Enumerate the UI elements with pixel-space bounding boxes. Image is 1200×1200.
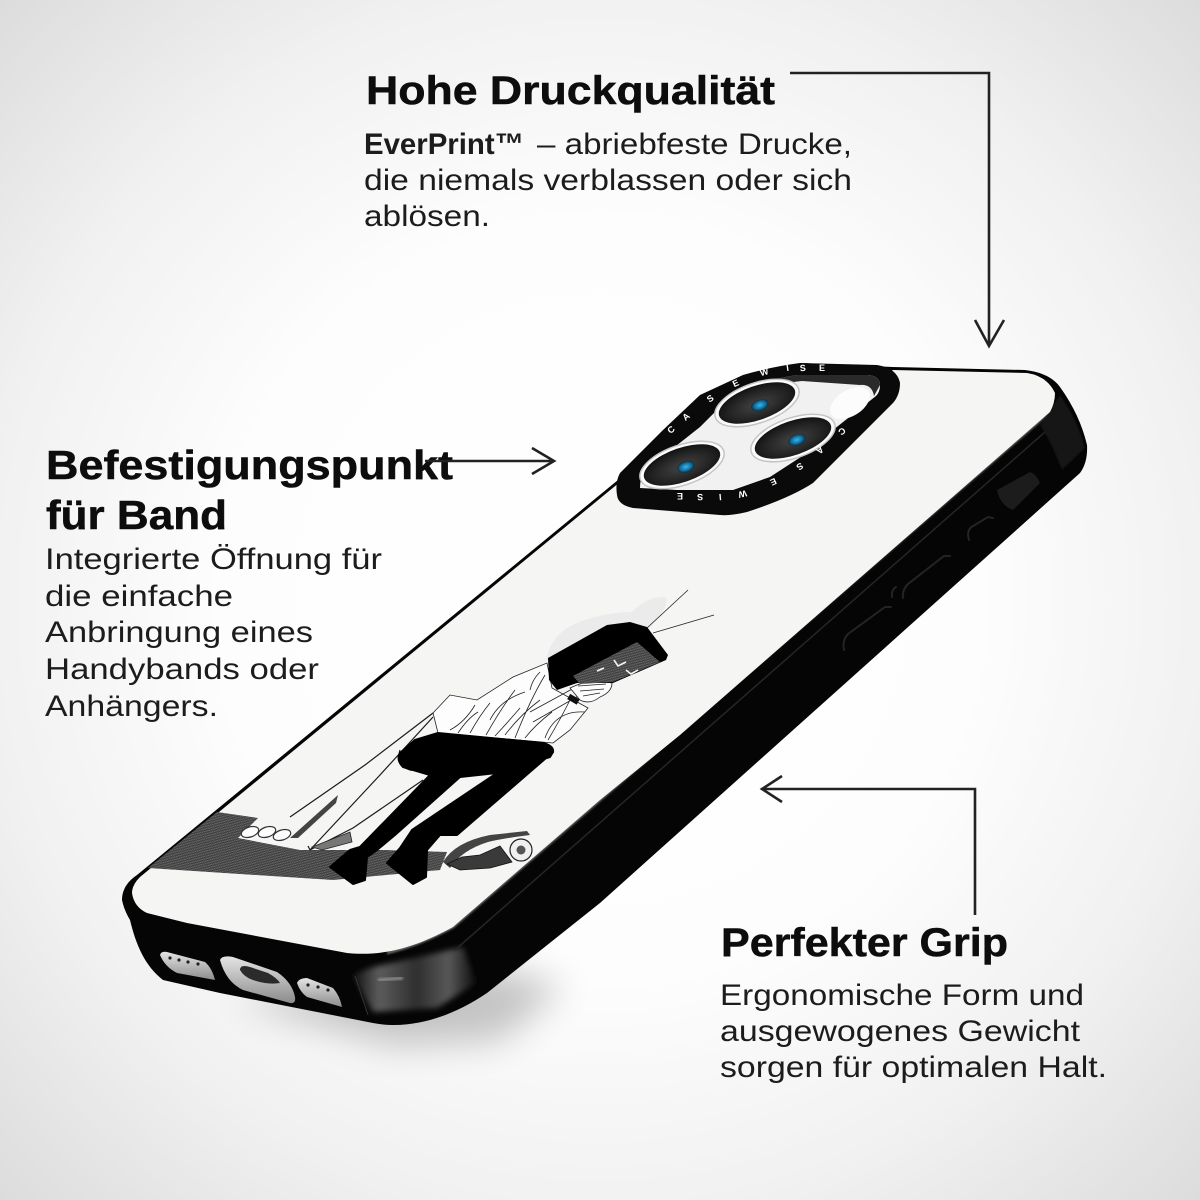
lens top (709, 370, 805, 436)
arrow to print (790, 73, 1004, 346)
heading (46, 442, 453, 538)
brand lettering: A (680, 410, 692, 423)
camera ring (616, 363, 900, 515)
back face (132, 370, 1055, 954)
ghost shadow behind head (546, 597, 667, 660)
heading: Hohe Druckqualität (366, 69, 775, 113)
brand lettering: S (697, 492, 703, 502)
description: Anhängers. (45, 690, 218, 723)
camera opening (640, 375, 880, 490)
brand lettering: W (759, 366, 770, 378)
inner wall shade (738, 375, 880, 396)
brand lettering: E (819, 363, 825, 373)
brand lettering (665, 363, 848, 502)
brand lettering: S (799, 363, 806, 373)
jacket outline (433, 663, 588, 743)
brand lettering: E (768, 476, 778, 488)
head and hair (548, 622, 668, 690)
brand lettering: C (836, 425, 848, 438)
description: Ergonomische Form und (720, 979, 1084, 1012)
brand lettering: A (814, 444, 826, 457)
description: ablösen. (364, 200, 490, 233)
description: Integrierte Öffnung für (45, 543, 382, 576)
lens left (634, 432, 730, 498)
arrow to strap point (425, 448, 554, 474)
printed illustration (148, 590, 714, 884)
antenna lines (647, 590, 714, 633)
description (364, 128, 852, 233)
shoe details (240, 795, 352, 850)
arrow to grip (762, 776, 975, 915)
description (45, 543, 382, 723)
phone case (122, 363, 1087, 1025)
heading: für Band (46, 492, 227, 538)
brand lettering: W (737, 488, 748, 500)
brand lettering: S (705, 393, 716, 404)
brand lettering: S (794, 461, 805, 472)
description: die einfache (45, 580, 233, 613)
brand lettering: I (786, 363, 790, 373)
side buttons (844, 472, 1040, 650)
phone drop shadow (235, 965, 565, 1045)
description: – abriebfeste Drucke, (537, 128, 852, 161)
brand lettering: E (731, 377, 741, 389)
camera island (616, 363, 900, 515)
hatched ground band (148, 812, 447, 880)
callout: print quality (364, 69, 1004, 346)
description: EverPrint™ (364, 128, 524, 161)
bumper highlights (352, 395, 1085, 1015)
flash (824, 380, 876, 426)
heading: Befestigungspunkt (46, 442, 453, 488)
callout: strap attachment (45, 442, 554, 723)
lens right (745, 405, 841, 471)
description (720, 979, 1107, 1084)
heading: Perfekter Grip (721, 921, 1008, 965)
description: die niemals verblassen oder sich (364, 164, 852, 197)
brand lettering: E (677, 491, 683, 501)
bumper silhouette (122, 363, 1087, 1025)
trouser lines (290, 713, 433, 850)
skateboard (443, 831, 532, 870)
description: sorgen für optimalen Halt. (720, 1051, 1107, 1084)
brand lettering: C (665, 423, 677, 436)
hand (567, 681, 612, 705)
callout: grip (720, 776, 1107, 1084)
description: Handybands oder (45, 653, 319, 686)
charging port and speakers (160, 952, 342, 1007)
brand lettering: I (719, 492, 722, 502)
description: Anbringung eines (45, 616, 313, 649)
black trousers (330, 733, 553, 884)
description: ausgewogenes Gewicht (720, 1015, 1081, 1048)
